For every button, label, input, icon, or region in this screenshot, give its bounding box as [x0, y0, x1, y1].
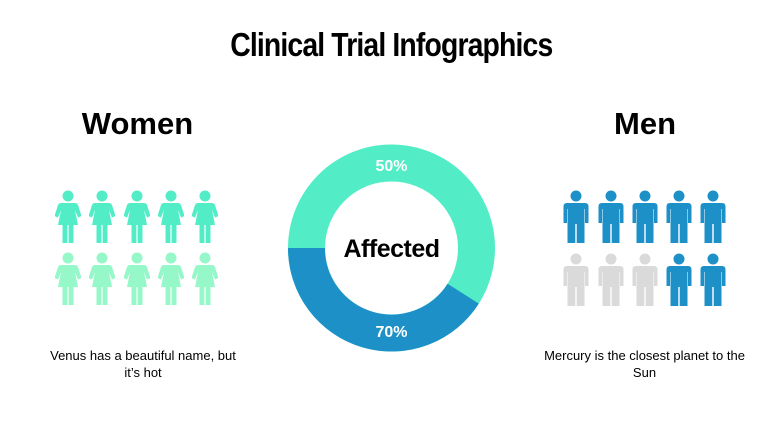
icons: men	[564, 190, 726, 306]
heading: women: Women	[82, 106, 193, 141]
donut chart: 50%	[375, 158, 408, 175]
text: women: Venus has a beautiful name, but it’s hot	[50, 348, 236, 380]
donut chart: 70%	[375, 324, 408, 341]
title: Clinical Trial Infographics	[230, 26, 553, 63]
icons: women	[55, 190, 218, 305]
text: men: Mercury is the closest planet to the Sun	[544, 348, 745, 380]
donut chart	[288, 144, 495, 352]
donut chart: Affected	[343, 235, 440, 263]
heading: men: Men	[614, 106, 676, 141]
